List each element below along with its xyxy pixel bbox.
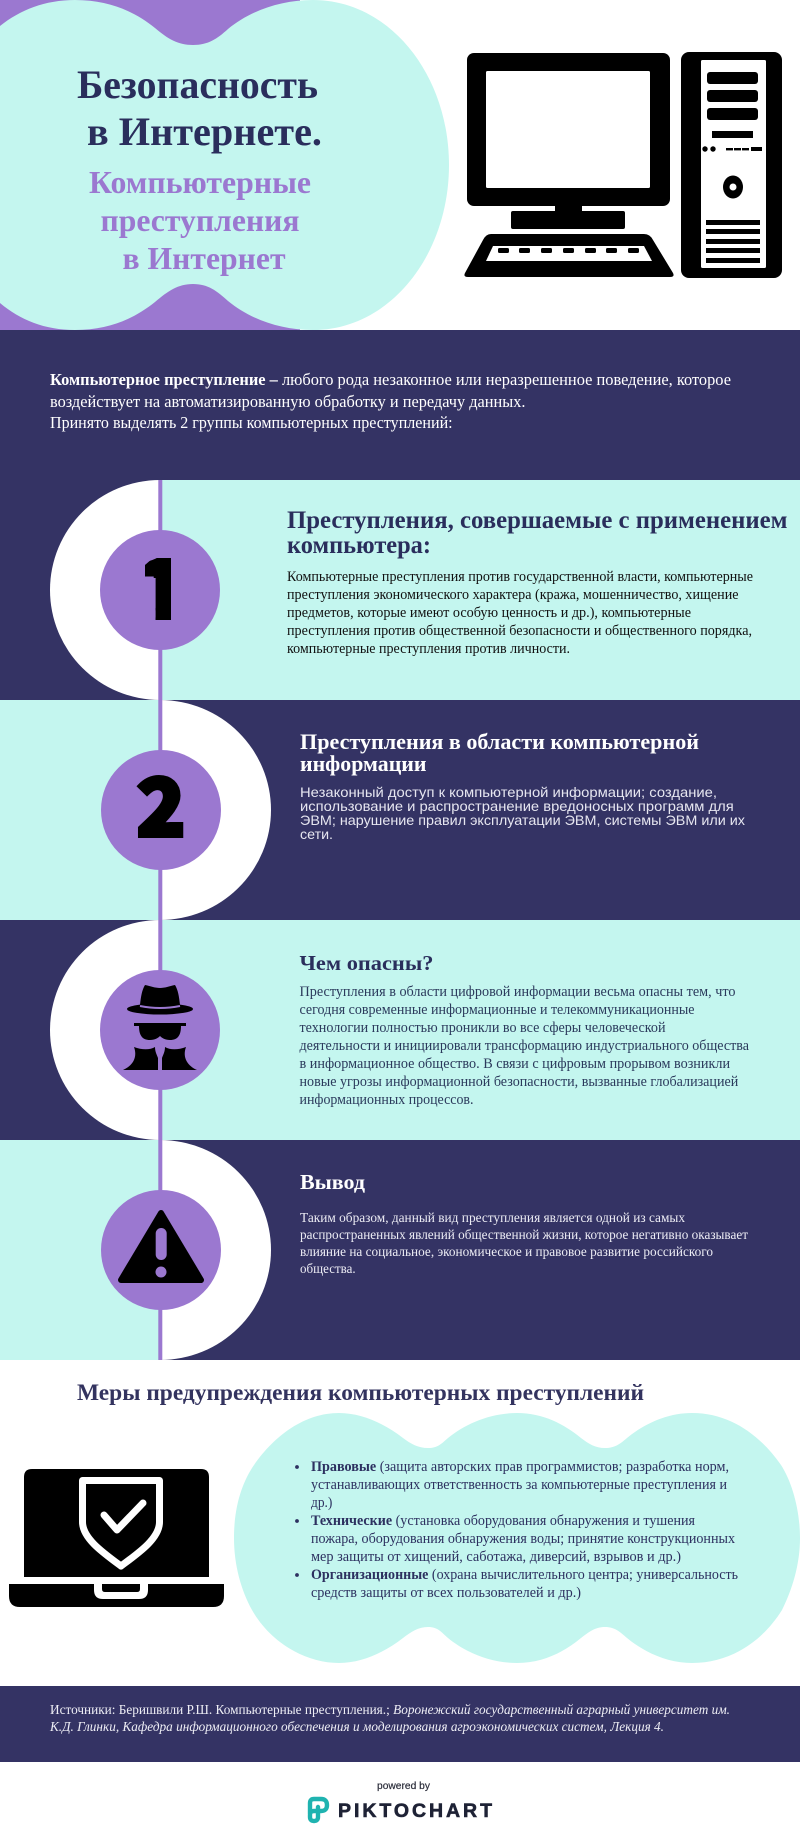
badge: warning icon bbox=[101, 1190, 221, 1310]
text: section 2 body: Незаконный доступ к компьютерной информации; создание, bbox=[300, 784, 717, 800]
timeline line bbox=[158, 480, 162, 1360]
list: measures bbox=[295, 1459, 738, 1601]
monitor bbox=[467, 53, 670, 229]
list: measures: Технические (установка оборудования обнаружения и тушения bbox=[311, 1513, 695, 1529]
heading: section 2: Преступления в области компьютерной bbox=[300, 729, 699, 754]
logo: powered by Piktochart: PIKTOCHART bbox=[338, 1800, 492, 1822]
logo: powered by Piktochart: powered by bbox=[377, 1780, 431, 1792]
heading: section 2: информации bbox=[300, 751, 427, 776]
list: measures: устанавливающих ответственность за компьютерные преступления и bbox=[311, 1477, 727, 1493]
panel: section 3 bbox=[0, 920, 800, 1140]
list: measures: средств защиты от всех пользователей и др.) bbox=[311, 1585, 581, 1601]
subtitle: преступления bbox=[100, 202, 300, 238]
text: section 1 body bbox=[287, 569, 753, 657]
text: section 1 body: преступления экономического характера (кража, мошенничество, хищение bbox=[287, 587, 739, 603]
keyboard bbox=[464, 234, 674, 277]
list: measures: Организационные (охрана вычислительного центра; универсальность bbox=[311, 1567, 738, 1583]
text: section 1 body: преступления против общественной безопасности и общественного порядка, bbox=[287, 623, 752, 639]
subtitle bbox=[89, 164, 311, 276]
badge: spy icon bbox=[100, 970, 220, 1090]
heading: section 1: компьютера: bbox=[287, 532, 431, 559]
text: section 2 body: сети. bbox=[300, 826, 333, 842]
text: section 3 body: в информационное общество. В связи с цифровым прорывом возникли bbox=[300, 1056, 730, 1072]
panel: definition intro bbox=[0, 330, 800, 480]
text: section 4 body: Таким образом, данный вид преступления является одной из самых bbox=[300, 1211, 685, 1226]
intro text: Принято выделять 2 группы компьютерных преступлений: bbox=[50, 413, 453, 432]
intro text: воздействует на автоматизированную обработку и передачу данных. bbox=[50, 392, 526, 411]
logo: powered by Piktochart bbox=[310, 1780, 492, 1822]
header blob with title bbox=[0, 0, 449, 330]
badge: number 1: 1 bbox=[136, 524, 188, 645]
icon: desktop computer bbox=[464, 52, 782, 278]
text: section 2 body bbox=[300, 784, 745, 842]
intro text bbox=[50, 370, 731, 432]
title bbox=[77, 62, 322, 154]
text: section 4 body bbox=[300, 1211, 748, 1277]
list: measures: Правовые (защита авторских прав программистов; разработка норм, bbox=[311, 1459, 729, 1475]
panel: measures blob bbox=[234, 1413, 800, 1663]
text: sources: Источники: Беришвили Р.Ш. Компьютерные преступления.; Воронежский государственный аграрный университет им. bbox=[50, 1703, 730, 1718]
text: section 3 body: новые угрозы информационной безопасности, вызванные глобализацией bbox=[300, 1074, 738, 1090]
heading: prevention measures: Меры предупреждения компьютерных преступлений bbox=[77, 1380, 644, 1405]
badge: number 2 bbox=[101, 744, 221, 870]
intro text: Компьютерное преступление – любого рода незаконное или неразрешенное поведение, которое bbox=[50, 370, 731, 389]
heading: section 2 bbox=[300, 729, 699, 776]
text: section 3 body: информационных процессов. bbox=[300, 1092, 474, 1108]
panel: section 2 bbox=[0, 700, 800, 920]
text: section 4 body: распространенных явлений общественной жизни, которое негативно оказывает bbox=[300, 1228, 748, 1243]
text: sources bbox=[49, 1703, 730, 1735]
list: measures: др.) bbox=[311, 1495, 332, 1511]
text: section 2 body: использование и распространение вредоносных программ для bbox=[300, 798, 734, 814]
list: measures: пожара, оборудования обнаружения воды; принятие конструкционных bbox=[311, 1531, 736, 1547]
heading: section 1 bbox=[287, 507, 788, 559]
panel: section 1 bbox=[0, 480, 800, 700]
text: section 3 body: деятельности и инициировали трансформацию индустриального общества bbox=[300, 1038, 749, 1054]
text: section 2 body: ЭВМ; нарушение правил эксплуатации ЭВМ, системы ЭВМ или их bbox=[300, 812, 745, 828]
panel: sources footer bbox=[0, 1686, 800, 1762]
icon: laptop with shield bbox=[9, 1469, 224, 1607]
text: section 4 body: влияние на социальное, экономическое и правовое развитие российского bbox=[300, 1245, 713, 1260]
panel: section 4 bbox=[0, 1140, 800, 1360]
text: section 3 body: сегодня современные информационные и телекоммуникационные bbox=[300, 1002, 695, 1018]
badge: number 1 bbox=[100, 524, 220, 650]
heading: section 4: Вывод bbox=[300, 1170, 365, 1194]
text: sources: К.Д. Глинки, Кафедра информационного обеспечения и моделирования агроэкономических систем, Лекция 4. bbox=[49, 1720, 664, 1735]
text: section 1 body: Компьютерные преступления против государственной власти, компьютерные bbox=[287, 569, 753, 585]
badge: number 2: 2 bbox=[137, 744, 185, 860]
text: section 4 body: общества. bbox=[300, 1262, 356, 1277]
heading: section 3: Чем опасны? bbox=[300, 951, 434, 975]
subtitle: в Интернет bbox=[122, 240, 286, 276]
text: section 1 body: предметов, которые имеют особую ценность и др.), компьютерные bbox=[287, 605, 691, 621]
tower bbox=[681, 52, 782, 278]
title: Безопасность bbox=[77, 62, 318, 107]
text: section 1 body: компьютерные преступления против личности. bbox=[287, 641, 570, 657]
text: section 3 body: технологии полностью проникли во все сферы человеческой bbox=[300, 1020, 666, 1036]
text: section 3 body bbox=[300, 984, 749, 1108]
heading: section 1: Преступления, совершаемые с применением bbox=[287, 507, 788, 534]
text: section 3 body: Преступления в области цифровой информации весьма опасны тем, что bbox=[300, 984, 736, 1000]
title: в Интернете. bbox=[87, 109, 322, 154]
list: measures: мер защиты от хищений, саботажа, диверсий, взрывов и др.) bbox=[311, 1549, 681, 1565]
subtitle: Компьютерные bbox=[89, 164, 311, 200]
